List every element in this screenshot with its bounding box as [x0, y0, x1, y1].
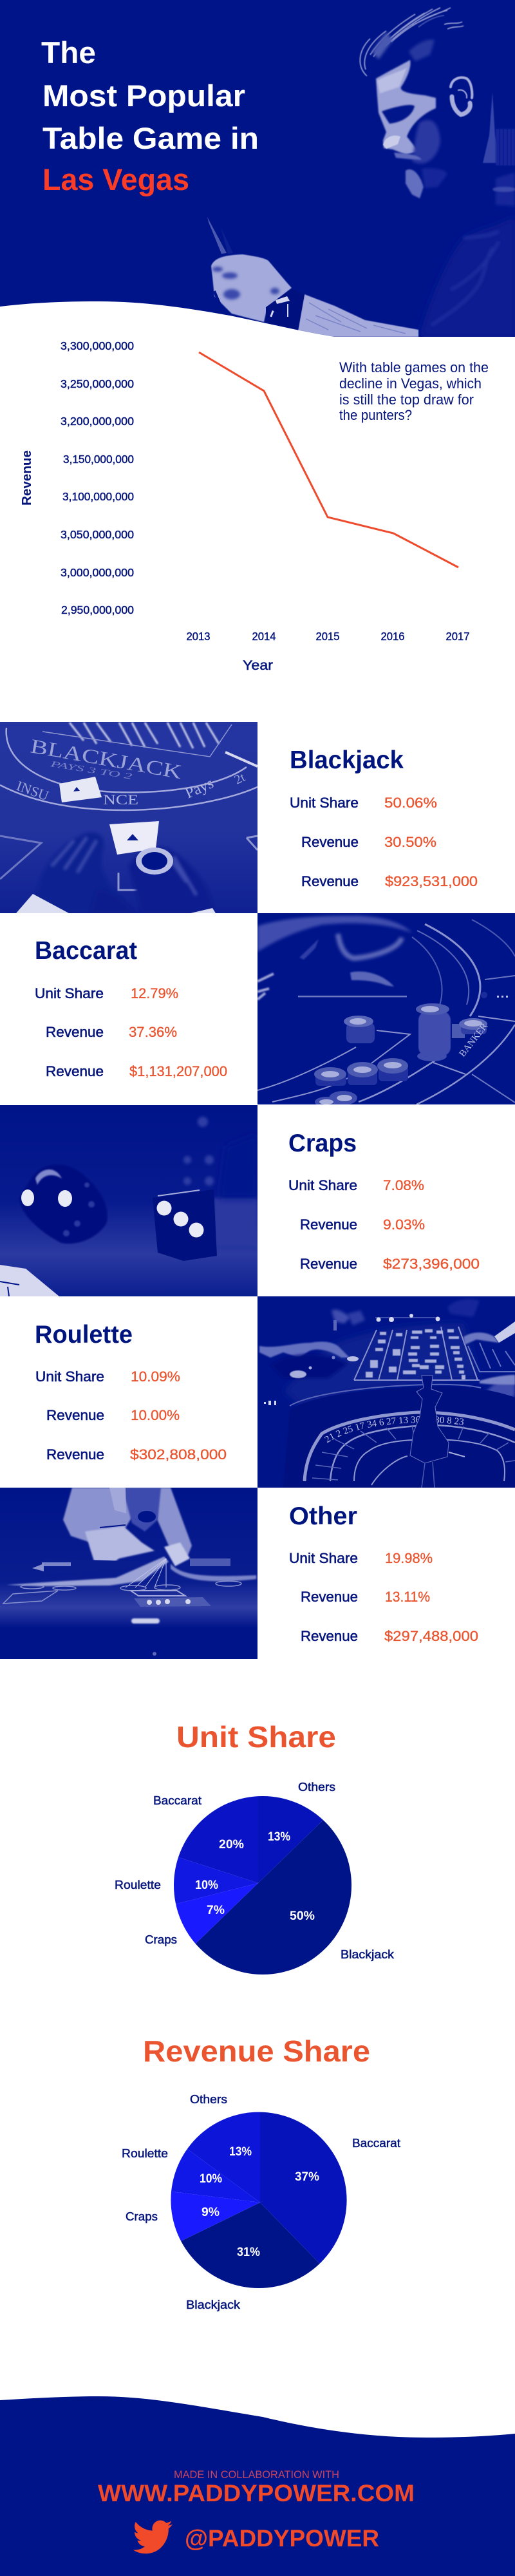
photo: blackjack table: BLACKJACK [29, 734, 184, 783]
photo: blackjack table: Pays [183, 775, 216, 802]
stats: blackjack: Unit Share [290, 795, 359, 811]
pie labels: revenue share: Roulette [122, 2146, 168, 2160]
pie labels: revenue share [122, 2092, 400, 2311]
stats: craps [288, 1177, 480, 1272]
stats: craps: Revenue [300, 1217, 357, 1233]
stats: blackjack: 30.50% [384, 834, 436, 850]
chart axis: revenue tick labels: 3,250,000,000 [61, 377, 134, 390]
text: twitter handle: @PADDYPOWER [185, 2525, 379, 2552]
photo: blackjack table: PAYS 3 TO 2 [49, 759, 133, 781]
chart axis: revenue tick labels: 3,100,000,000 [62, 490, 134, 503]
photo: roulette wheel and table: 21 2 25 17 34 6 27 13 36 11 30 8 23 [324, 1416, 464, 1443]
pie labels: revenue share: Blackjack [186, 2298, 241, 2311]
text: website: WWW.PADDYPOWER.COM [98, 2480, 415, 2506]
stats: blackjack: Revenue [301, 873, 359, 889]
heading: other: Other [289, 1502, 357, 1530]
stats: craps: Revenue [300, 1256, 357, 1272]
heading: hero title: Most Popular [42, 79, 245, 113]
chart axis: revenue tick labels: 3,000,000,000 [61, 566, 134, 579]
pie labels: unit share: Roulette [115, 1878, 161, 1891]
pie percentages: unit share: 13% [268, 1830, 290, 1844]
stats: roulette: 10.00% [131, 1407, 180, 1423]
stats: baccarat: 12.79% [131, 985, 178, 1001]
pie labels: revenue share: Baccarat [352, 2136, 400, 2150]
pie chart: revenue share [171, 2112, 347, 2288]
stats: other: $297,488,000 [384, 1628, 478, 1644]
panel: roulette [35, 1296, 515, 1488]
chart axis: revenue tick labels: 2,950,000,000 [61, 603, 134, 616]
heading: baccarat: Baccarat [35, 937, 137, 965]
photo: bearded man holding a card [207, 8, 515, 337]
callout: chart question: the punters? [339, 407, 412, 423]
pie labels: unit share: Blackjack [341, 1947, 395, 1961]
photo: baccarat table with chips: BANKER [458, 1021, 490, 1059]
pie percentages: revenue share: 10% [200, 2172, 222, 2186]
pie percentages: unit share [195, 1830, 315, 1923]
pie labels: unit share: Baccarat [153, 1794, 201, 1807]
chart axis: year labels: 2015 [315, 630, 340, 643]
photo: dealer spreading cards [0, 1488, 258, 1659]
stats: other: Unit Share [289, 1550, 358, 1566]
pie chart: unit share [174, 1796, 351, 1975]
line chart: table game revenue by year [20, 339, 489, 673]
pie percentages: unit share: 7% [207, 1904, 225, 1917]
axis title: year: Year [243, 658, 273, 673]
chart axis: year labels: 2017 [445, 630, 470, 643]
stats: roulette: Revenue [46, 1407, 104, 1423]
icon: twitter bird [133, 2521, 173, 2553]
chart axis: revenue tick labels: 3,200,000,000 [61, 415, 134, 428]
photo: blackjack table: NCE [103, 791, 138, 808]
pie labels: revenue share: Craps [126, 2210, 158, 2223]
callout: chart question: decline in Vegas, which [339, 375, 482, 392]
stats: other: 13.11% [385, 1589, 430, 1605]
callout: chart question: is still the top draw for [339, 392, 474, 408]
stats: other [289, 1550, 478, 1644]
stats: roulette [35, 1368, 227, 1463]
stats: baccarat: $1,131,207,000 [129, 1063, 227, 1079]
photo: rolling dice [0, 1105, 258, 1296]
stats: blackjack: Revenue [301, 834, 359, 850]
heading: unit share: Unit Share [176, 1720, 336, 1754]
panel: hero header [0, 0, 515, 337]
pie percentages: revenue share: 37% [295, 2170, 319, 2184]
pie labels: unit share: Craps [145, 1933, 177, 1946]
stats: craps: 9.03% [383, 1217, 425, 1233]
chart axis: revenue tick labels: 3,300,000,000 [61, 339, 134, 352]
data line [199, 352, 458, 567]
stats: blackjack: 50.06% [384, 795, 437, 811]
heading: hero title: The [41, 35, 96, 70]
stats: baccarat: Revenue [46, 1024, 104, 1040]
pie percentages: unit share: 10% [195, 1879, 218, 1892]
stats: other: 19.98% [385, 1550, 433, 1566]
stats: blackjack: $923,531,000 [385, 873, 478, 889]
pie percentages: revenue share [200, 2145, 319, 2259]
panel: blackjack [0, 722, 478, 913]
pie percentages: revenue share: 9% [201, 2206, 220, 2219]
panel: other [0, 1488, 478, 1659]
chart axis: year labels: 2014 [252, 630, 276, 643]
pie labels: unit share [115, 1780, 395, 1961]
pie percentages: revenue share: 13% [229, 2145, 252, 2159]
chart axis: revenue tick labels: 3,150,000,000 [63, 453, 134, 466]
stats: craps: $273,396,000 [383, 1256, 480, 1272]
callout: chart question [339, 359, 489, 423]
stats: roulette: Revenue [46, 1446, 104, 1463]
pie percentages: unit share: 20% [219, 1838, 244, 1852]
heading: hero title [41, 35, 259, 196]
stats: craps: 7.08% [383, 1177, 424, 1193]
pie labels: revenue share: Others [190, 2092, 227, 2106]
stats: roulette: Unit Share [35, 1368, 104, 1385]
heading: hero title: Table Game in [42, 121, 259, 155]
stats: blackjack [290, 795, 478, 889]
heading: craps: Craps [288, 1130, 357, 1157]
photo: baccarat table with chips [258, 913, 515, 1107]
heading: revenue share: Revenue Share [143, 2034, 370, 2068]
stats: other: Revenue [301, 1628, 358, 1644]
chart axis: revenue tick labels [61, 339, 134, 616]
axis title: revenue: Revenue [20, 450, 34, 506]
section: revenue share [122, 2040, 400, 2312]
photo: blackjack table: INSU [14, 777, 51, 804]
pie labels: unit share: Others [298, 1780, 335, 1794]
stats: roulette: 10.09% [131, 1368, 180, 1385]
photo: blackjack table: 2t [232, 770, 248, 787]
panel: footer [0, 2396, 515, 2576]
pie percentages: revenue share: 31% [237, 2246, 260, 2259]
panel: craps [0, 1105, 480, 1296]
stats: baccarat: Unit Share [35, 985, 104, 1001]
heading: blackjack: Blackjack [290, 746, 404, 774]
stats: baccarat [35, 985, 227, 1079]
pie percentages: unit share: 50% [290, 1909, 315, 1923]
chart axis: year labels: 2016 [381, 630, 404, 643]
stats: baccarat: Revenue [46, 1063, 104, 1079]
stats: craps: Unit Share [288, 1177, 357, 1193]
photo: blackjack table [0, 722, 258, 913]
panel: baccarat [35, 913, 515, 1107]
stats: other: Revenue [301, 1589, 358, 1605]
stats: baccarat: 37.36% [129, 1024, 177, 1040]
callout: chart question: With table games on the [339, 359, 489, 375]
photo: roulette wheel and table [258, 1296, 515, 1488]
section: unit share [115, 1726, 394, 1975]
chart axis: year labels [187, 630, 470, 643]
text: collaboration credit: MADE IN COLLABORATION WITH [174, 2468, 339, 2481]
chart axis: revenue tick labels: 3,050,000,000 [61, 528, 134, 541]
stats: roulette: $302,808,000 [130, 1446, 227, 1463]
heading: roulette: Roulette [35, 1321, 133, 1349]
chart axis: year labels: 2013 [187, 630, 210, 643]
heading: hero title: Las Vegas [42, 162, 189, 196]
